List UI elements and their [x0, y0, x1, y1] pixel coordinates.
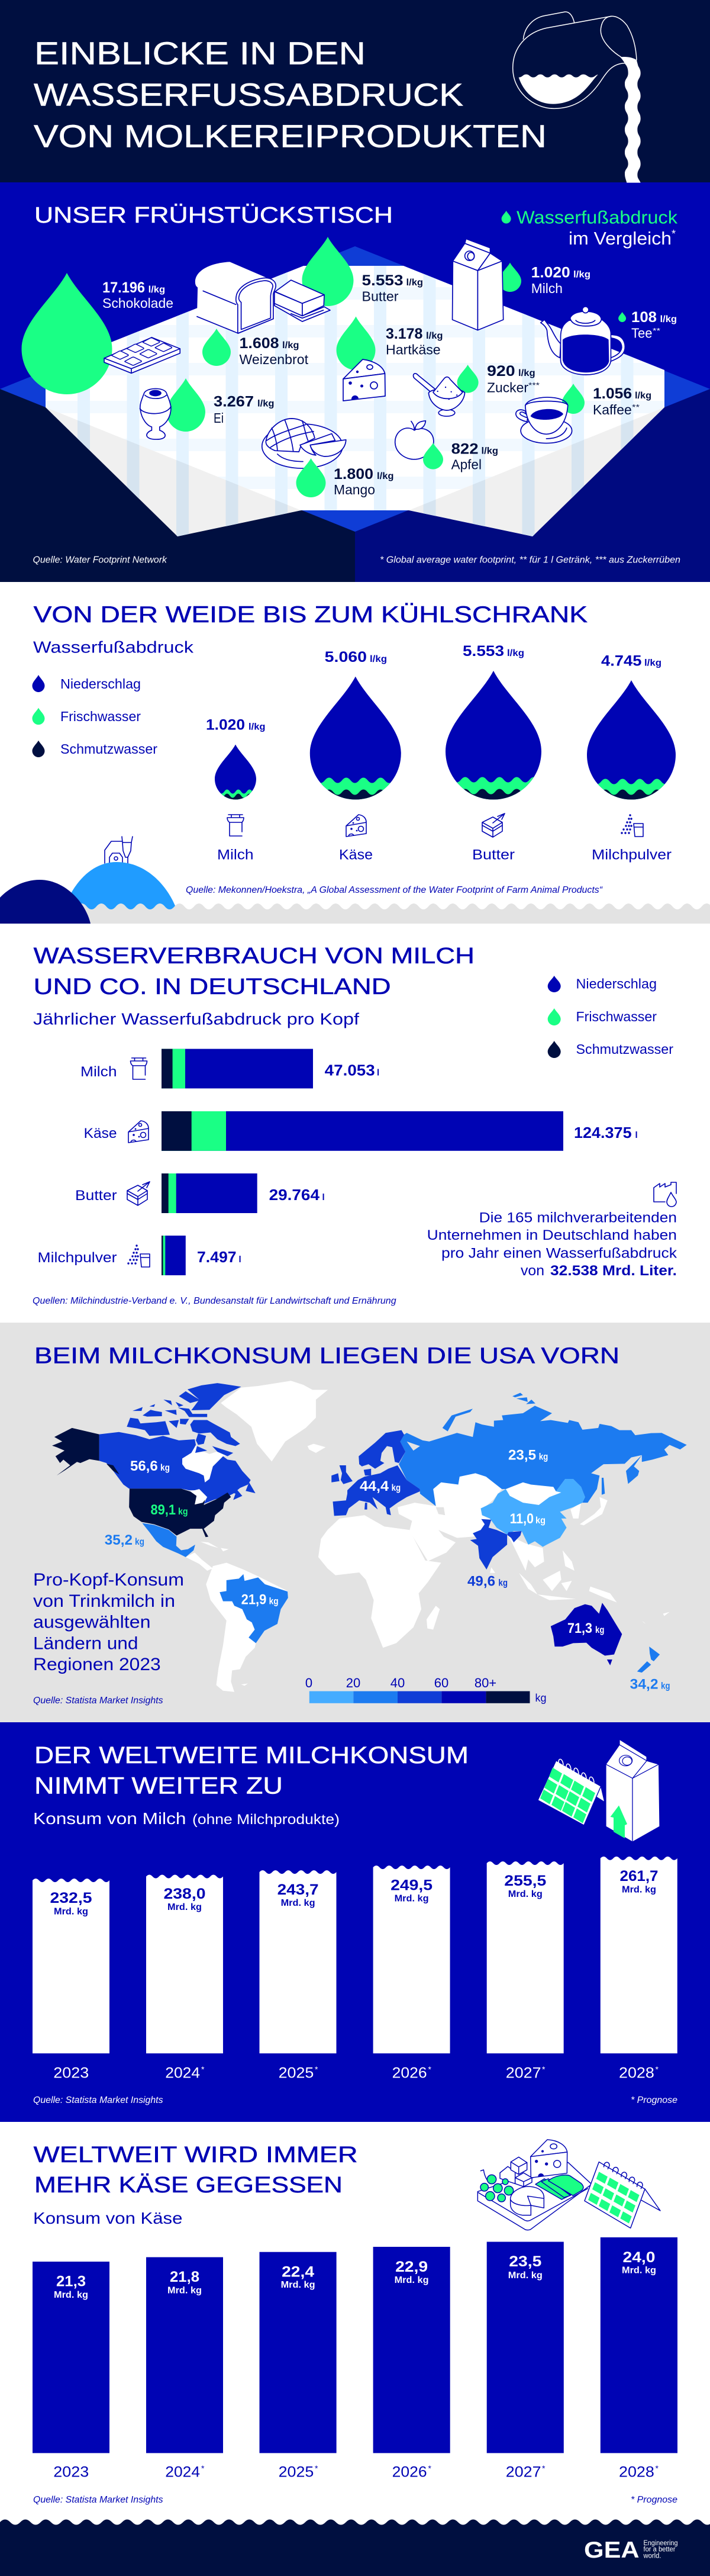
label: Kaffee: ** [632, 403, 640, 411]
map label: Neuseeland 34,2 kg [630, 1677, 670, 1693]
bar: Butter: Butter [75, 1188, 117, 1204]
source: Milchindustrie-Verband: Quellen: Milchindustrie-Verband e. V., Bundesanstalt für Landwirtschaft und Ernährung [33, 1296, 396, 1306]
legend: Wasserfußabdruck im Vergleich: * [672, 228, 676, 240]
bar: Käse: Käse [84, 1125, 117, 1141]
bar chart: Konsum von Milch: * [315, 2064, 318, 2074]
label: Schokolade [102, 279, 173, 311]
heading: Von der Weide bis zum Kühlschrank: VON DER WEIDE BIS ZUM KÜHLSCHRANK [34, 602, 588, 628]
label: Kaffee: Kaffee [593, 402, 632, 417]
icon: sugar bowl with spoon [414, 374, 465, 416]
map label: USA 89,1 kg: 89,1 [150, 1502, 176, 1518]
text block: Pro-Kopf-Konsum: Pro-Kopf-Konsum [33, 1570, 184, 1590]
bar chart: Konsum von Milch: Mrd. kg [167, 1902, 202, 1912]
label: Weizenbrot [239, 335, 309, 367]
label: Milch: 1.020 [531, 264, 570, 281]
icon: cheese wedge [343, 359, 385, 401]
source: Water Footprint Network: Quelle: Water Footprint Network [33, 555, 167, 565]
logo: GEA Engineering for a better world [584, 2538, 678, 2563]
drop: Tee [618, 312, 626, 322]
drop: Butter [302, 237, 354, 306]
drop chart: Milchpulver [587, 680, 676, 799]
label: Tee [631, 309, 677, 341]
drop chart: Käse [310, 676, 401, 799]
map label: Indien 49,6 kg: 49,6 [467, 1574, 495, 1590]
bar chart: Konsum von Käse: 22,9 [395, 2259, 428, 2275]
bar: Käse [84, 1111, 638, 1151]
label: Milch: Milch [531, 281, 563, 296]
label: Apfel [451, 441, 498, 472]
product labels: Milchpulver [592, 847, 672, 863]
label: Kaffee: 1.056 [593, 385, 632, 402]
bar chart: Konsum von Milch: Mrd. kg [508, 1889, 543, 1899]
table scene background: shadows and diamond [0, 246, 710, 582]
bar chart: Konsum von Milch: 243,7 [277, 1882, 319, 1898]
label: Mango: l/kg [377, 471, 394, 481]
wave band [77, 903, 710, 924]
bar chart: Konsum von Milch: 2025 [279, 2064, 314, 2081]
label: Hartkäse: Hartkäse [386, 342, 441, 358]
text block: Pro-Kopf-Konsum [33, 1570, 184, 1674]
drop: Schokolade [21, 273, 112, 394]
source: Statista (map): Quelle: Statista Market Insights [33, 1696, 163, 1706]
callout: 32.538 Mrd. Liter [427, 1210, 677, 1279]
label: Tee: l/kg [660, 314, 677, 324]
drop: Weizenbrot [202, 329, 231, 366]
value: Milchpulver 4.745 l/kg: l/kg [644, 658, 661, 668]
legend: water types [32, 675, 157, 757]
map label: Europa 44,4 kg: kg [392, 1483, 401, 1493]
bar chart: Konsum von Milch: Mrd. kg [622, 1884, 656, 1895]
subheading: Konsum von Milch: Konsum von Milch [33, 1809, 186, 1828]
icon: cow on hill [105, 837, 133, 863]
label: Milch [531, 264, 590, 296]
value: Butter 5.553 l/kg [463, 643, 524, 660]
label: Mango: Mango [334, 482, 375, 497]
bar chart: Konsum von Milch: * [428, 2064, 432, 2074]
heading: Der weltweite Milchkonsum nimmt weiter zu: DER WELTWEITE MILCHKONSUM [34, 1742, 469, 1768]
product labels: Milch [217, 847, 254, 863]
text block: Pro-Kopf-Konsum: Ländern und [33, 1634, 138, 1654]
bar chart: Konsum von Käse: 2026 [392, 2464, 427, 2481]
product labels [217, 847, 672, 863]
label: Kaffee: l/kg [635, 391, 651, 401]
map label: Russland 23,5 kg [508, 1447, 548, 1463]
bar: Milchpulver: 7.497 [197, 1249, 237, 1266]
bar chart: Konsum von Milch [33, 1857, 677, 2081]
subheading: Konsum von Milch [33, 1809, 340, 1828]
product labels: Butter [472, 847, 515, 863]
bar chart: Konsum von Milch: 2026 [392, 2064, 427, 2081]
label: Zucker: l/kg [518, 368, 535, 378]
bar chart: Konsum von Milch: 2023 [53, 2064, 89, 2081]
label: Schokolade: 17.196 [102, 279, 145, 296]
legend: color scale kg: kg [535, 1692, 547, 1704]
bar chart: Konsum von Käse: Mrd. kg [395, 2275, 429, 2285]
callout: 32.538 Mrd. Liter: pro Jahr einen Wasserfußabdruck [441, 1246, 677, 1262]
legend: color scale kg: 40 [390, 1675, 405, 1690]
hill: light blue [59, 862, 176, 924]
heading: Beim Milchkonsum liegen die USA vorn: BEIM MILCHKONSUM LIEGEN DIE USA VORN [34, 1344, 619, 1369]
map label: Kanada 56,6 kg: kg [160, 1463, 170, 1473]
bar chart: Konsum von Käse: 2024 [165, 2464, 200, 2481]
icon: milk carton [453, 239, 504, 330]
label: Weizenbrot: l/kg [282, 340, 299, 350]
bar chart: Konsum von Milch: * [656, 2064, 659, 2074]
heading: Weltweit wird immer mehr Käse gegessen [34, 2143, 358, 2198]
heading: Wasserverbrauch von Milch und Co. in Deutschland: UND CO. IN DEUTSCHLAND [34, 975, 391, 999]
source: Statista (cheese): Quelle: Statista Market Insights [33, 2495, 163, 2505]
callout: 32.538 Mrd. Liter: Unternehmen in Deutschland haben [427, 1227, 677, 1243]
legend: water types: Niederschlag [60, 676, 141, 692]
legend: water types: Frischwasser [576, 1009, 657, 1024]
text block: Pro-Kopf-Konsum: Regionen 2023 [33, 1655, 161, 1674]
bar chart: Konsum von Milch: Mrd. kg [395, 1894, 429, 1904]
label: Tee: ** [653, 326, 660, 335]
bar chart: Konsum von Milch: 261,7 [620, 1868, 658, 1884]
legend: water types: Frischwasser [60, 709, 141, 724]
label: Milch: l/kg [573, 270, 590, 279]
product labels: Käse [339, 847, 373, 863]
map label: Europa 44,4 kg [360, 1478, 401, 1494]
drop: Ei [166, 378, 205, 432]
heading: Wasserverbrauch von Milch und Co. in Deutschland [34, 944, 475, 999]
map label: Neuseeland 34,2 kg: 34,2 [630, 1677, 658, 1693]
bar chart: Konsum von Milch: 238,0 [163, 1886, 206, 1902]
label: Tee: Tee [631, 326, 652, 341]
map label: Indien 49,6 kg [467, 1574, 508, 1590]
map label: Neuseeland 34,2 kg: kg [661, 1681, 670, 1691]
logo: GEA Engineering for a better world: GEA [584, 2538, 640, 2563]
legend: color scale kg [305, 1675, 547, 1704]
bar: Milch: Milch [80, 1064, 117, 1080]
value: Käse 5.060 l/kg: 5.060 [325, 649, 367, 665]
bar chart: Konsum von Käse: Mrd. kg [54, 2290, 88, 2300]
bar chart: Konsum von Käse: * [315, 2464, 318, 2473]
icon: calendar [538, 1759, 605, 1825]
map: Europe, Asia, Africa, Oceania [318, 1393, 687, 1673]
heading: Weltweit wird immer mehr Käse gegessen: MEHR KÄSE GEGESSEN [34, 2173, 343, 2198]
callout: 32.538 Mrd. Liter: von [521, 1263, 544, 1279]
bar chart: Konsum von Käse: * [201, 2464, 205, 2473]
label: Butter: Butter [362, 289, 399, 304]
bar: Milchpulver: Milchpulver [38, 1250, 117, 1266]
map: Americas [52, 1381, 328, 1692]
icon: teapot [541, 307, 625, 375]
drop: Hartkäse [336, 316, 375, 370]
bar chart: Konsum von Käse: 22,4 [282, 2264, 314, 2281]
label: Apfel: 822 [451, 441, 479, 458]
bar chart: Konsum von Käse: 2023 [53, 2464, 89, 2481]
icon: pouring milk jug [513, 12, 641, 183]
bar chart: Konsum von Käse: Mrd. kg [167, 2285, 202, 2296]
drop: Apfel [423, 443, 443, 469]
map label: Mexiko 35,2 kg: kg [135, 1537, 144, 1547]
bar: Butter: 29.764 [269, 1187, 320, 1204]
callout: 32.538 Mrd. Liter: 32.538 Mrd. Liter. [550, 1263, 677, 1279]
label: Ei: Ei [214, 410, 224, 426]
text block: Pro-Kopf-Konsum: von Trinkmilch in [33, 1591, 175, 1611]
subheading: Konsum von Käse: Konsum von Käse [33, 2209, 182, 2227]
map label: Russland 23,5 kg: 23,5 [508, 1447, 536, 1463]
drop chart: Butter [446, 671, 541, 799]
footnote: Prognose (milk): * Prognose [631, 2095, 677, 2105]
map label: Mexiko 35,2 kg [105, 1532, 144, 1548]
legend: color scale kg: 20 [346, 1675, 360, 1690]
subheading: Jährlicher Wasserfußabdruck pro Kopf: Jährlicher Wasserfußabdruck pro Kopf [33, 1009, 359, 1028]
label: Butter [362, 272, 423, 304]
bar chart: Konsum von Käse: 24,0 [622, 2249, 656, 2266]
logo: GEA Engineering for a better world: Engineering [644, 2540, 678, 2547]
map label: Australien 71,3 kg: 71,3 [567, 1620, 592, 1636]
subheading: Wasserfußabdruck: Wasserfußabdruck [33, 638, 194, 656]
drop: Milch [499, 263, 521, 292]
heading: Unser Frühstückstisch: UNSER FRÜHSTÜCKSTISCH [34, 203, 393, 228]
bar: Käse: 124.375 [574, 1125, 632, 1141]
section background: milk consumption [0, 1722, 710, 2122]
bar chart: Konsum von Käse: 2028 [619, 2464, 654, 2481]
legend: water types: Schmutzwasser [576, 1041, 673, 1057]
icon: butter [482, 813, 505, 837]
icon: chocolate bar [104, 337, 180, 373]
label: Ei: 3.267 [214, 394, 254, 410]
bar: Käse: l [635, 1130, 638, 1140]
icon: cheese board with calendar [477, 2140, 660, 2230]
bar chart: Konsum von Käse: 21,8 [170, 2269, 199, 2285]
label: Schokolade: l/kg [149, 285, 165, 295]
bar chart: Konsum von Käse [33, 2237, 677, 2481]
icon: milk can [227, 815, 244, 836]
bar chart: Konsum von Milch: 255,5 [504, 1873, 546, 1889]
map label: China 11,0 kg: kg [535, 1516, 546, 1526]
label: Apfel: l/kg [482, 446, 498, 456]
bar chart: Konsum von Käse: * [428, 2464, 432, 2473]
bar chart: Konsum von Käse: 2025 [279, 2464, 314, 2481]
bar chart: Konsum von Milch: 2028 [619, 2064, 654, 2081]
label: Mango [334, 466, 394, 497]
text block: Pro-Kopf-Konsum: ausgewählten [33, 1612, 150, 1632]
bar chart: Konsum von Milch: 249,5 [390, 1877, 433, 1893]
map label: Australien 71,3 kg: kg [595, 1625, 604, 1635]
panel: checkered tablecloth [46, 266, 664, 536]
icon: milk powder [621, 814, 643, 837]
legend: color scale kg: 60 [434, 1675, 448, 1690]
drop chart: Milch [215, 745, 256, 799]
bar chart: Konsum von Milch: Mrd. kg [281, 1898, 315, 1908]
logo: GEA Engineering for a better world: for a better [644, 2546, 676, 2554]
map label: Europa 44,4 kg: 44,4 [360, 1478, 389, 1494]
legend: color scale kg: 0 [305, 1675, 312, 1690]
label: Hartkäse: l/kg [426, 331, 443, 341]
section background: world map [0, 1323, 710, 1722]
source: Statista (milk): Quelle: Statista Market Insights [33, 2095, 163, 2105]
label: Mango: 1.800 [334, 466, 373, 483]
heading: Weltweit wird immer mehr Käse gegessen: WELTWEIT WIRD IMMER [34, 2143, 358, 2167]
bar chart: Konsum von Käse: * [542, 2464, 546, 2473]
hill: dark blue [0, 880, 91, 924]
label: Apfel: Apfel [451, 457, 482, 472]
title: EINBLICKE IN DEN [34, 36, 366, 71]
bar chart: Konsum von Milch: 2027 [506, 2064, 541, 2081]
map label: Kanada 56,6 kg [130, 1458, 170, 1474]
label: Ei [214, 394, 275, 426]
map label: Russland 23,5 kg: kg [539, 1452, 548, 1462]
bar chart: Konsum von Käse: Mrd. kg [281, 2280, 315, 2290]
label: Kaffee [593, 385, 651, 417]
label: Butter: l/kg [406, 278, 423, 288]
drop: Kaffee [562, 384, 585, 414]
drop: Zucker [457, 365, 479, 393]
section background: breakfast table [0, 182, 710, 582]
label: Zucker [487, 363, 540, 395]
legend: color scale kg: 80+ [475, 1675, 496, 1690]
value: Milchpulver 4.745 l/kg: 4.745 [601, 653, 642, 670]
legend: water types: Niederschlag [576, 976, 657, 992]
map label: Kanada 56,6 kg: 56,6 [130, 1458, 158, 1474]
bar: Milchpulver: l [239, 1255, 241, 1265]
value: Käse 5.060 l/kg [325, 649, 387, 665]
label: Zucker: 920 [487, 363, 515, 380]
bar chart: Konsum von Milch: Mrd. kg [54, 1906, 88, 1917]
label: Ei: l/kg [257, 399, 275, 409]
section background: header [0, 0, 710, 182]
bar chart: Konsum von Käse: Mrd. kg [508, 2271, 543, 2281]
bar: Butter: l [322, 1192, 325, 1202]
bar chart: Konsum von Milch: * [201, 2064, 205, 2074]
value: Milch 1.020 l/kg: 1.020 [206, 717, 245, 734]
source: Mekonnen/Hoekstra: Quelle: Mekonnen/Hoekstra, „A Global Assessment of the Water Footprint of Farm Animal Products“ [186, 885, 603, 895]
map label: China 11,0 kg: 11,0 [510, 1511, 534, 1527]
callout: 32.538 Mrd. Liter: Die 165 milchverarbeitenden [479, 1210, 677, 1226]
icon: bread loaf [195, 262, 276, 333]
bar: Butter [75, 1173, 325, 1213]
map label: Indien 49,6 kg: kg [498, 1578, 508, 1588]
value: Milch 1.020 l/kg [206, 717, 265, 734]
icon: milk carton with arrow [606, 1739, 660, 1842]
bar chart: Konsum von Milch: 232,5 [50, 1890, 92, 1906]
map label: Mexiko 35,2 kg: 35,2 [105, 1532, 133, 1548]
bar: Milchpulver [38, 1236, 241, 1275]
footer band with wave [0, 2520, 710, 2576]
icon: factory with drop [654, 1182, 676, 1207]
label: Weizenbrot: Weizenbrot [239, 352, 309, 367]
value: Milchpulver 4.745 l/kg [601, 653, 661, 670]
legend: water types [548, 976, 673, 1058]
bar chart: Konsum von Käse: 23,5 [509, 2253, 541, 2270]
icon: cheese [346, 815, 366, 837]
label: Hartkäse: 3.178 [386, 326, 422, 342]
value: Butter 5.553 l/kg: l/kg [507, 648, 524, 658]
legend: Wasserfußabdruck im Vergleich [502, 207, 678, 249]
icon: mango on plate [262, 419, 346, 468]
title [34, 36, 547, 155]
map label: Brasilien 21,9 kg: 21,9 [241, 1592, 266, 1608]
value: Butter 5.553 l/kg: 5.553 [463, 643, 504, 660]
map label: USA 89,1 kg: kg [178, 1507, 188, 1517]
icon: coffee cup [516, 397, 572, 443]
footnotes: table: * Global average water footprint, ** für 1 l Getränk, *** aus Zuckerrüben [380, 555, 680, 565]
bar chart: Konsum von Milch: * [542, 2064, 546, 2074]
subheading: Konsum von Milch: (ohne Milchprodukte) [192, 1812, 340, 1828]
label: Hartkäse [386, 326, 443, 358]
heading: Der weltweite Milchkonsum nimmt weiter zu [34, 1742, 469, 1799]
bar chart: Konsum von Milch: 2024 [165, 2064, 200, 2081]
footnote: Prognose (cheese): * Prognose [631, 2495, 677, 2505]
label: Schokolade: Schokolade [102, 295, 173, 311]
bar chart: Konsum von Käse: * [656, 2464, 659, 2473]
label: Zucker: *** [528, 381, 540, 390]
value: Milch 1.020 l/kg: l/kg [248, 722, 265, 732]
logo: GEA Engineering for a better world: world. [643, 2552, 661, 2559]
label: Butter: 5.553 [362, 272, 404, 289]
map label: Brasilien 21,9 kg: kg [269, 1597, 279, 1607]
icon: butter dish [275, 280, 330, 321]
drop: Mango [296, 458, 325, 497]
bar: Milch: l [377, 1068, 379, 1078]
legend: Wasserfußabdruck im Vergleich: im Vergleich [569, 228, 672, 249]
heading: Wasserverbrauch von Milch und Co. in Deutschland: WASSERVERBRAUCH VON MILCH [34, 944, 475, 969]
legend: Wasserfußabdruck im Vergleich: Wasserfußabdruck [517, 207, 678, 227]
value: Käse 5.060 l/kg: l/kg [370, 654, 387, 664]
title: VON MOLKEREIPRODUKTEN [34, 119, 547, 155]
bar chart: Konsum von Käse: 21,3 [56, 2273, 86, 2290]
heading: Der weltweite Milchkonsum nimmt weiter zu: NIMMT WEITER ZU [34, 1773, 283, 1799]
icon: egg in egg cup [140, 388, 171, 439]
title: WASSERFUSSABDRUCK [34, 78, 463, 113]
bar: Milch [80, 1049, 379, 1088]
label: Zucker: Zucker [487, 380, 528, 395]
bar chart: Konsum von Käse: Mrd. kg [622, 2266, 656, 2276]
label: Tee: 108 [631, 309, 657, 326]
bar: Milch: 47.053 [325, 1063, 375, 1079]
bar chart: Konsum von Käse: 2027 [506, 2464, 541, 2481]
legend: water types: Schmutzwasser [60, 741, 157, 757]
icon: apple [395, 421, 434, 459]
label: Weizenbrot: 1.608 [239, 335, 279, 352]
